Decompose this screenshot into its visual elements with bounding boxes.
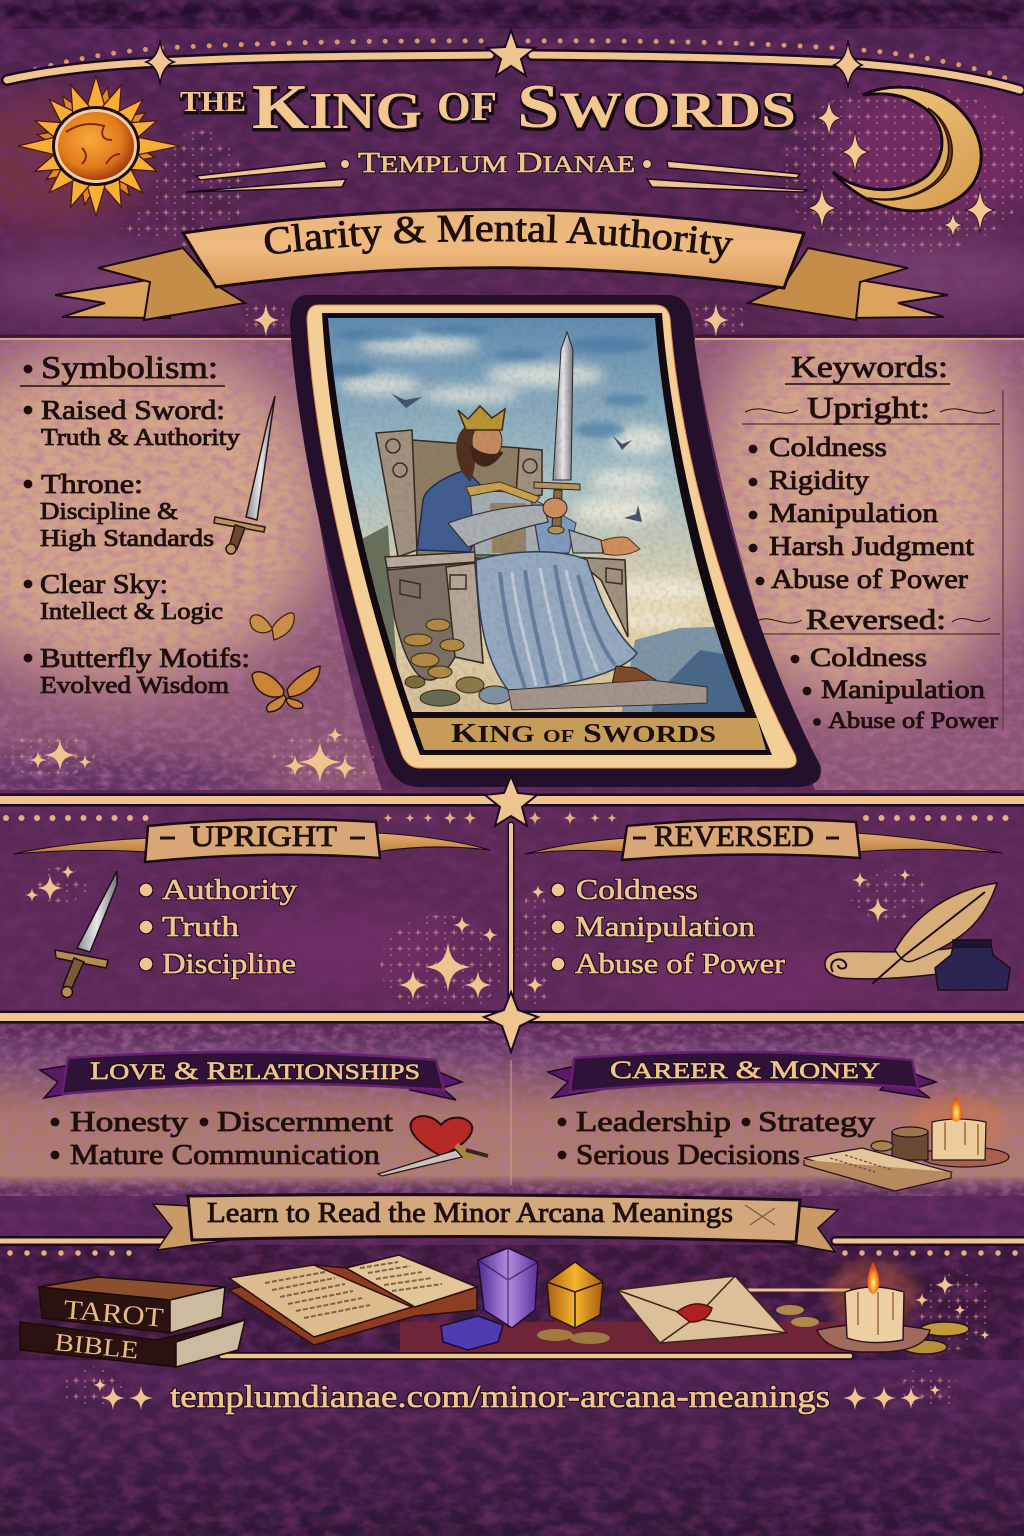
- panel: upright: [13, 819, 498, 1000]
- plants: [404, 619, 511, 706]
- list: upright keywords: [749, 432, 975, 594]
- raised sword: [534, 332, 580, 534]
- arms and hands: [448, 505, 548, 547]
- banner: love: [40, 1052, 462, 1100]
- list: love meanings: Discernment: [217, 1106, 393, 1138]
- heading: keywords: Keywords:: [791, 349, 948, 384]
- item: throne: Throne:: [41, 469, 143, 499]
- list: reversed meanings: Abuse of Power: [575, 948, 785, 980]
- list: love meanings: Mature Communication: [70, 1139, 381, 1171]
- tunic: [532, 500, 576, 554]
- heading: upright: [742, 390, 1000, 425]
- decorative stars reversed: [526, 869, 911, 994]
- icon: candle on dish: [817, 1260, 969, 1354]
- list: upright keywords: Coldness: [769, 432, 887, 462]
- throne carvings: [386, 439, 622, 598]
- list: reversed meanings: Coldness: [576, 874, 698, 906]
- boot: [612, 666, 656, 684]
- item: clear sky: Intellect & Logic: [40, 599, 223, 625]
- panel edge lines: [0, 336, 1024, 339]
- list: upright keywords: Abuse of Power: [771, 564, 968, 594]
- list: reversed meanings: Manipulation: [575, 911, 756, 943]
- banner: Clarity & Mental Authority: [54, 208, 948, 322]
- banner: upright: UPRIGHT: [190, 820, 337, 853]
- tarot card: [290, 295, 821, 787]
- icon: stacked books: BIBLE: [53, 1329, 140, 1365]
- robe: [476, 552, 637, 690]
- card name plate: [413, 718, 766, 750]
- icon: purple crystal: [441, 1248, 538, 1350]
- item: throne: Discipline &: [40, 499, 178, 525]
- title: [180, 71, 796, 142]
- item: raised sword: Truth & Authority: [41, 425, 240, 451]
- icon: open book: [229, 1255, 477, 1345]
- title: SWORDS: [517, 73, 796, 141]
- panel: keywords text: [742, 349, 1000, 733]
- heading: symbolism: Symbolism:: [41, 349, 218, 385]
- list: upright keywords: Harsh Judgment: [769, 531, 975, 561]
- icon: sealed envelope: [617, 1276, 787, 1343]
- top ornamental line: [7, 30, 1020, 90]
- banner: love: LOVE & R ELATIONSHIPS: [90, 1058, 420, 1085]
- banner: Clarity & Mental Authority: Clarity & Mental Authority: [264, 214, 734, 264]
- item: clear sky: [24, 569, 223, 625]
- list: reversed meanings: [552, 874, 785, 980]
- website url: [101, 1378, 922, 1414]
- panel: love and career background: [0, 1024, 1024, 1196]
- birds: [392, 394, 642, 522]
- icon: stacked books: TAROT: [62, 1294, 165, 1333]
- title: OF: [437, 83, 497, 129]
- list: love meanings: [51, 1106, 393, 1171]
- icon: small butterfly: [250, 613, 294, 640]
- banner: career: CAREER & M ONEY: [610, 1057, 880, 1084]
- list: career meanings: Leadership: [576, 1106, 731, 1138]
- list: reversed keywords: Abuse of Power: [828, 708, 998, 733]
- banner: learn to read: [0, 1195, 1024, 1253]
- panel: career and money: [548, 1052, 1009, 1191]
- website url: templumdianae.com/minor-arcana-meanings: [170, 1378, 830, 1414]
- heading: upright: Upright:: [807, 390, 930, 425]
- heading: reversed: Reversed:: [806, 604, 946, 636]
- panel: love and relationships: [40, 1052, 488, 1176]
- icon: heart and dagger: [378, 1116, 488, 1176]
- icon: crescent moon: [807, 87, 995, 238]
- head and crown: [456, 428, 476, 482]
- list: reversed keywords: Coldness: [810, 643, 927, 672]
- icon: quill, scroll and ink: [825, 883, 1010, 990]
- throne: [376, 430, 628, 680]
- icon: sun: [18, 76, 180, 216]
- list: reversed keywords: [791, 643, 998, 733]
- decorative stars upright: [25, 865, 498, 1000]
- heading: reversed: [745, 604, 1000, 636]
- list: upright meanings: Authority: [162, 874, 298, 906]
- item: butterfly motifs: Butterfly Motifs:: [40, 643, 250, 673]
- item: butterfly motifs: [24, 643, 250, 699]
- card frame: [290, 295, 821, 787]
- icon: large butterfly: [252, 666, 320, 712]
- title: THE: [180, 87, 246, 118]
- panel: symbolism background: [0, 340, 382, 790]
- panel: symbolism text: [20, 349, 250, 699]
- list: career meanings: [558, 1106, 876, 1171]
- list: reversed keywords: Manipulation: [821, 675, 985, 704]
- section divider: middle top: [0, 776, 1024, 1000]
- list: upright meanings: [140, 874, 298, 980]
- item: throne: High Standards: [40, 526, 214, 552]
- decorative stars left: [29, 303, 729, 782]
- banner: reversed: [525, 819, 1002, 860]
- subtitle: Templum Dianae: TEMPLUM D IANAE: [358, 148, 635, 179]
- icon: candle, coins and book: [804, 1095, 1009, 1191]
- icon: amber crystal: [547, 1262, 603, 1328]
- icon: sword symbolism: [214, 396, 275, 554]
- list: love meanings: Honesty: [70, 1106, 189, 1138]
- banner: career: [548, 1052, 936, 1098]
- subtitle: Templum Dianae: [186, 148, 807, 192]
- item: raised sword: [24, 395, 240, 451]
- item: clear sky: Clear Sky:: [40, 569, 168, 599]
- list: career meanings: Serious Decisions: [576, 1139, 800, 1171]
- icon: stacked books: [20, 1277, 245, 1367]
- decorative stars bottom right: [93, 1275, 990, 1396]
- cape: [416, 470, 481, 553]
- list: upright keywords: Rigidity: [769, 465, 870, 495]
- shelf with cloth runner: [222, 1290, 850, 1356]
- panel: keywords background: [694, 340, 1024, 790]
- item: raised sword: Raised Sword:: [41, 395, 225, 425]
- icon: sword: [55, 871, 117, 998]
- item: throne: [24, 469, 214, 552]
- section divider: lower: [0, 992, 1024, 1185]
- card name plate: KING OF SWORDS: [451, 718, 716, 748]
- list: upright keywords: Manipulation: [769, 498, 939, 528]
- list: career meanings: Strategy: [758, 1106, 876, 1138]
- hills: [622, 626, 745, 712]
- card illustration: king on throne: [320, 310, 760, 720]
- list: upright meanings: Discipline: [162, 948, 296, 980]
- list: upright meanings: Truth: [162, 911, 240, 943]
- banner: upright: [13, 819, 490, 862]
- banner: reversed: REVERSED: [654, 820, 814, 853]
- banner: learn to read: Learn to Read the Minor Arcana Meanings: [207, 1198, 733, 1229]
- panel: reversed: [525, 819, 1010, 994]
- step: [508, 680, 707, 710]
- item: butterfly motifs: Evolved Wisdom: [40, 673, 229, 699]
- title: KING: [252, 71, 422, 142]
